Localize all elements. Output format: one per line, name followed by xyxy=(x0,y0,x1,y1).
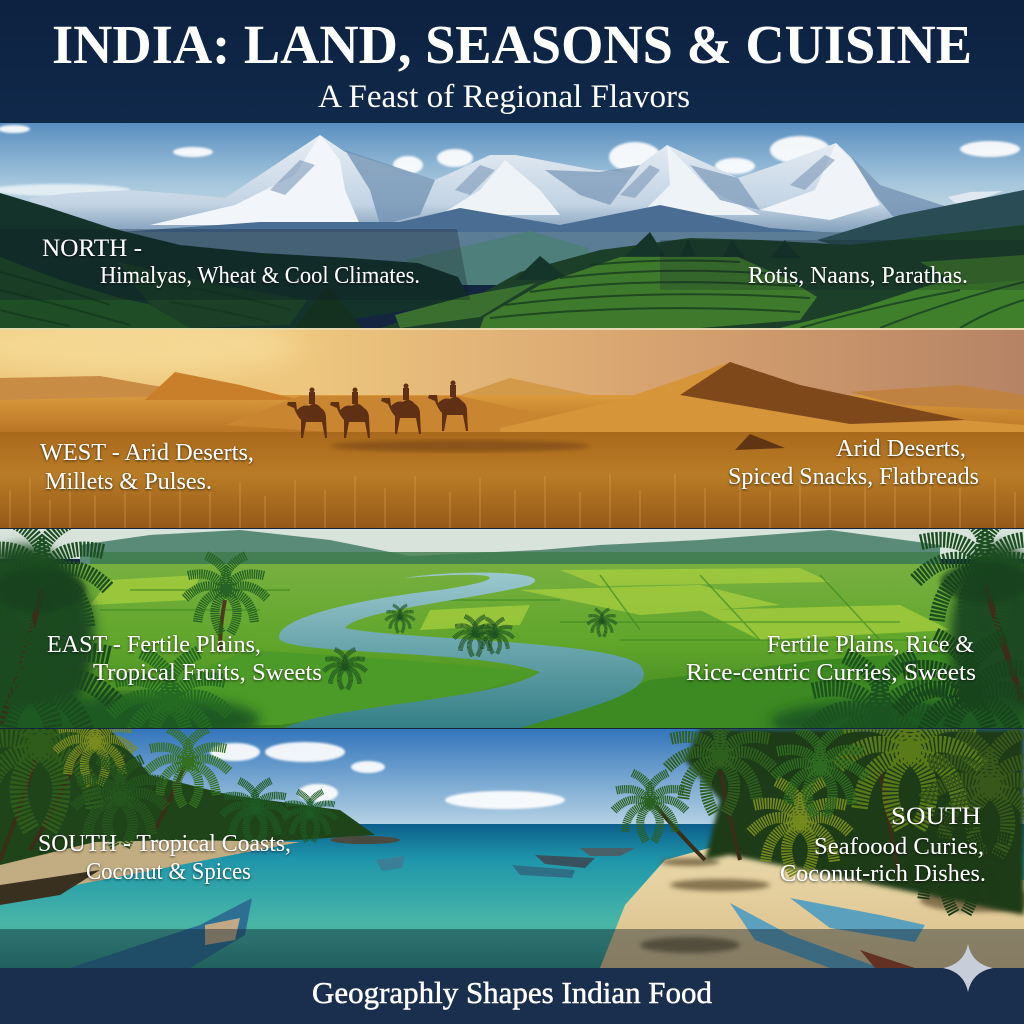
clouds xyxy=(0,125,1020,196)
footer banner xyxy=(0,968,1024,1024)
sea xyxy=(0,824,1024,968)
far hills xyxy=(80,530,940,564)
footer text: Geographly Shapes Indian Food xyxy=(312,975,712,1010)
label: west: WEST - Arid Deserts, xyxy=(40,440,254,466)
text band right xyxy=(660,240,1024,290)
panel: south xyxy=(0,729,1024,968)
field xyxy=(0,564,1024,728)
palm shadows on sand xyxy=(640,858,1024,953)
beach xyxy=(600,845,1024,968)
right hill xyxy=(817,190,1024,250)
label: east food line 1: Fertile Plains, Rice & xyxy=(767,632,974,658)
terraces xyxy=(0,255,1024,328)
label: south: SOUTH - Tropical Coasts, xyxy=(38,831,291,857)
left jungle xyxy=(0,672,400,905)
title: INDIA: LAND, SEASONS & CUISINE xyxy=(52,14,972,75)
panel: east xyxy=(0,529,1024,728)
label: west crops: Millets & Pulses. xyxy=(45,469,212,495)
clouds xyxy=(210,742,565,809)
boats xyxy=(70,848,925,968)
dunes xyxy=(0,362,1024,432)
panel: west xyxy=(0,310,1024,528)
text band left xyxy=(0,229,470,300)
panel: north xyxy=(0,123,1024,328)
camels xyxy=(287,380,468,438)
river xyxy=(279,573,644,728)
label: south crops: Coconut & Spices xyxy=(86,859,251,885)
subtitle: A Feast of Regional Flavors xyxy=(318,79,690,115)
label: north food: Rotis, Naans, Parathas. xyxy=(748,263,968,289)
palms right xyxy=(766,529,1024,728)
trees on ridge xyxy=(515,232,800,280)
rock xyxy=(735,434,785,450)
mountains xyxy=(30,135,1003,270)
sky xyxy=(110,729,1024,824)
header banner xyxy=(0,0,1024,123)
sky xyxy=(0,529,1024,559)
label: north climate: Himalyas, Wheat & Cool Climates. xyxy=(100,263,420,289)
right jungle xyxy=(614,683,1024,915)
valley mist xyxy=(128,232,843,262)
label: north: NORTH - xyxy=(42,235,142,262)
label: west food line 2: Spiced Snacks, Flatbreads xyxy=(728,464,979,490)
far hill xyxy=(405,231,600,285)
sky xyxy=(0,123,1024,206)
palms left xyxy=(0,529,618,728)
label: south food line 1: Seafoood Curies, xyxy=(814,834,984,860)
label: east crops: Tropical Fruits, Sweets xyxy=(93,660,322,686)
wheat field xyxy=(0,432,1024,528)
label: south food line 2: Coconut-rich Dishes. xyxy=(780,861,986,887)
bottom band xyxy=(0,929,1024,968)
label: west food line 1: Arid Deserts, xyxy=(836,436,966,462)
panel divider xyxy=(0,328,1024,330)
label: east food line 2: Rice-centric Curries, Sweets xyxy=(686,660,976,686)
left forest xyxy=(0,193,470,328)
label: east: EAST - Fertile Plains, xyxy=(47,632,261,658)
icon: sparkle xyxy=(943,944,993,992)
sky xyxy=(0,330,1024,400)
label: south heading right: SOUTH xyxy=(891,803,981,830)
